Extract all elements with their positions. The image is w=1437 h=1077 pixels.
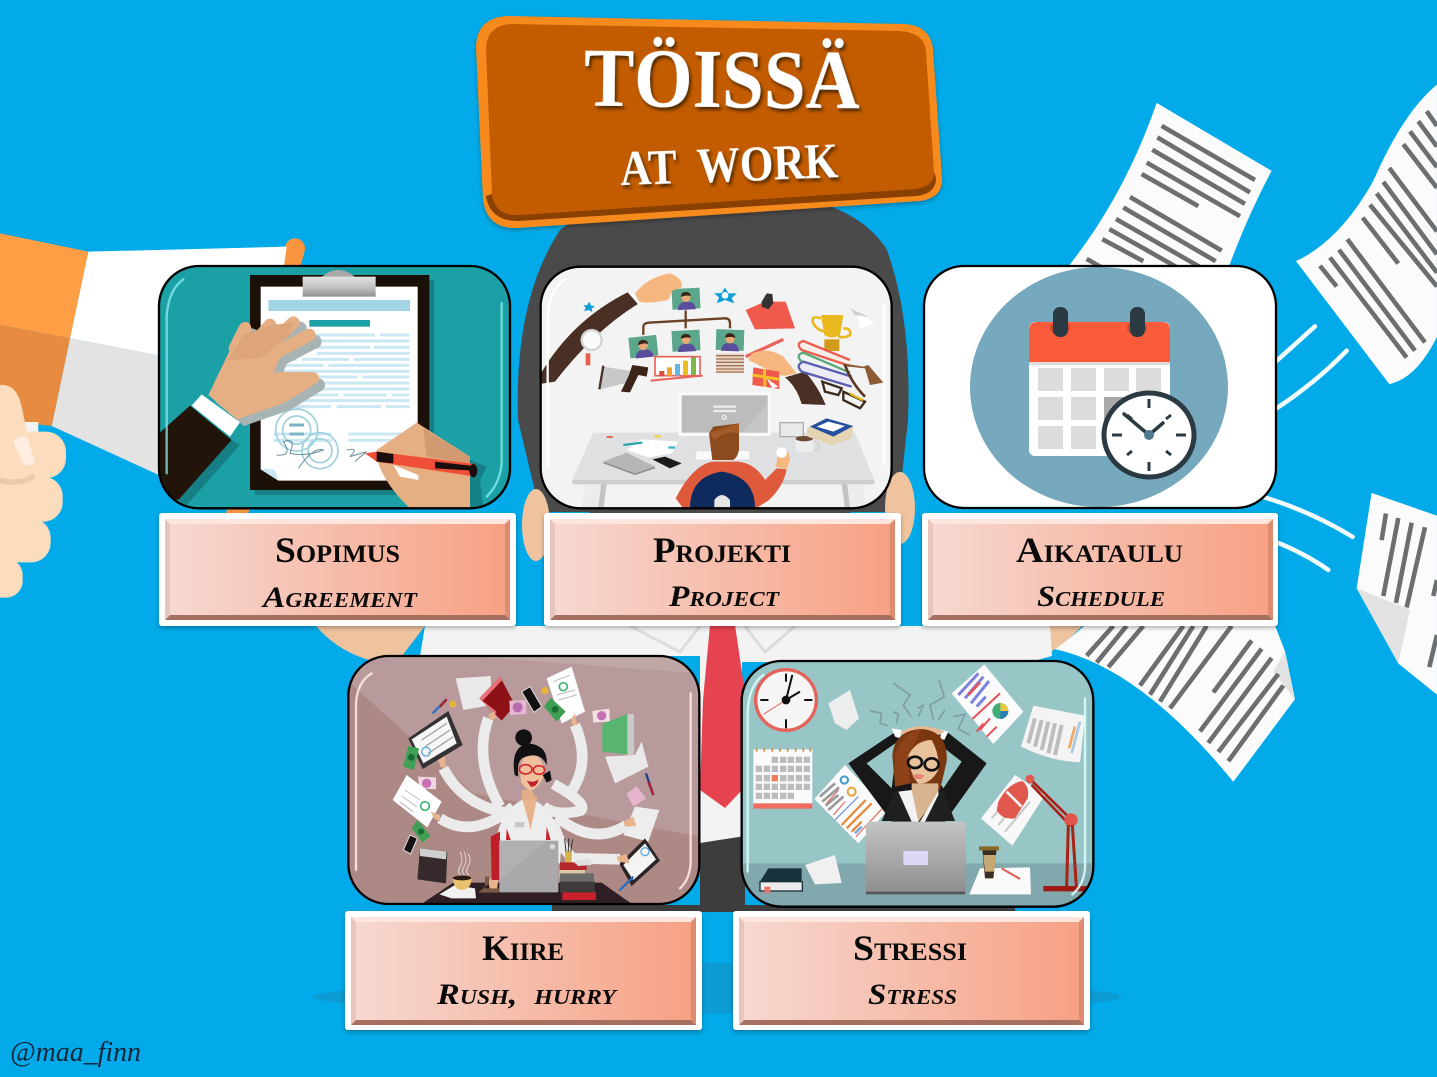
label: schedule — [922, 513, 1278, 626]
coffee cup — [439, 852, 476, 898]
megaphone handle — [233, 248, 295, 520]
panel: project image — [540, 267, 892, 513]
icon: report left — [814, 765, 888, 843]
label plate — [544, 513, 901, 626]
icon: upper arm and hand — [540, 273, 682, 384]
English word: Stress — [868, 978, 957, 1011]
Finnish word: Projekti — [653, 530, 791, 570]
icon: report right — [952, 664, 1023, 744]
icon: gift box — [752, 367, 779, 389]
English word: Agreement — [261, 581, 418, 614]
megaphone and fist — [0, 233, 295, 598]
woman holding her head — [848, 726, 987, 822]
icon: glasses — [822, 382, 865, 408]
torso — [497, 798, 562, 863]
icon: lamp and document — [981, 775, 1088, 891]
icon: coffee and note — [969, 846, 1031, 894]
ears and face — [522, 489, 550, 561]
hands — [431, 712, 636, 892]
icon: crumpled paper — [828, 690, 859, 730]
icon: writing hand with red pen — [365, 423, 487, 508]
title: Finnish: TÖISSÄ — [584, 32, 861, 127]
icon: book — [760, 868, 802, 894]
tie — [700, 625, 746, 808]
icon: desk items — [603, 418, 853, 475]
Finnish word: Sopimus — [275, 530, 400, 570]
gloss — [167, 279, 502, 497]
suit — [552, 836, 1015, 912]
label plate — [922, 513, 1278, 626]
icon: person from behind — [676, 423, 790, 508]
head — [520, 753, 544, 791]
icon: stars — [583, 287, 737, 312]
label: project — [544, 513, 901, 626]
panel: schedule image — [924, 266, 1276, 508]
label plate — [345, 911, 702, 1030]
hand shadow — [215, 328, 322, 426]
icon: circular backdrop — [970, 267, 1228, 507]
icon: desk — [572, 433, 874, 513]
flying items: top — [433, 667, 585, 723]
English word: Schedule — [1037, 580, 1165, 613]
speed streaks — [1257, 326, 1353, 570]
icon: organisation chart — [628, 287, 745, 359]
icon: stamps and signature — [276, 409, 367, 469]
floor shadow — [314, 963, 1122, 1014]
icon: trophy and books — [799, 315, 883, 397]
panel: stress image — [742, 661, 1093, 907]
arms — [440, 718, 627, 859]
desk — [423, 882, 630, 903]
label: rush — [345, 911, 702, 1030]
shirt — [420, 626, 1052, 845]
paper bottom — [1053, 617, 1295, 782]
paper right top — [1296, 85, 1437, 384]
label plate — [733, 911, 1090, 1030]
title: English: AT WORK — [619, 132, 839, 196]
label: agreement — [159, 513, 516, 626]
label: stress — [733, 911, 1090, 1030]
gloss — [548, 279, 884, 467]
icon: clipboard — [250, 270, 434, 495]
gloss — [356, 673, 691, 888]
English word: Rush, hurry — [436, 978, 618, 1011]
flying items: right — [592, 709, 660, 891]
shoulders skin — [316, 626, 1082, 665]
panel: agreement image — [159, 266, 510, 508]
icon: clock — [1104, 393, 1194, 477]
paper top — [1063, 103, 1272, 273]
paper right lower — [1357, 493, 1437, 695]
icon: crumpled paper — [805, 855, 842, 884]
English word: Project — [668, 580, 780, 613]
hair — [518, 190, 909, 512]
icon: stress lines — [870, 680, 970, 735]
desk stacks — [559, 838, 596, 900]
icon: red envelope — [746, 293, 795, 329]
label plate — [159, 513, 516, 626]
flying papers — [1053, 85, 1437, 782]
Finnish word: Stressi — [853, 928, 967, 968]
icon: calendar — [753, 748, 812, 809]
desk surface — [742, 863, 1093, 907]
icon: wall clock — [756, 670, 816, 730]
woman with many arms — [431, 712, 636, 892]
icon: laptop — [866, 822, 966, 894]
flying items: left — [393, 711, 463, 883]
wall shading — [348, 656, 699, 904]
fist — [0, 385, 66, 598]
icon: megaphone — [582, 308, 875, 392]
icon: monitor — [678, 393, 771, 436]
hand — [208, 323, 315, 419]
man figure — [316, 190, 1082, 912]
credit handle: @maa_finn — [10, 1036, 141, 1068]
panel: rush image — [348, 656, 699, 905]
laptop — [499, 841, 558, 892]
megaphone cone — [0, 233, 287, 482]
icon: text sheet — [1021, 706, 1085, 762]
Finnish word: Kiire — [482, 928, 564, 968]
Finnish word: Aikataulu — [1016, 530, 1183, 570]
icon: note lines and pencil hand — [716, 339, 826, 405]
icon: left hand and sleeve — [159, 323, 322, 505]
icon: calendar — [1029, 307, 1170, 456]
gloss — [748, 675, 1085, 894]
icon: bar chart — [651, 357, 703, 381]
banner plate — [476, 16, 942, 228]
title banner — [476, 16, 942, 228]
